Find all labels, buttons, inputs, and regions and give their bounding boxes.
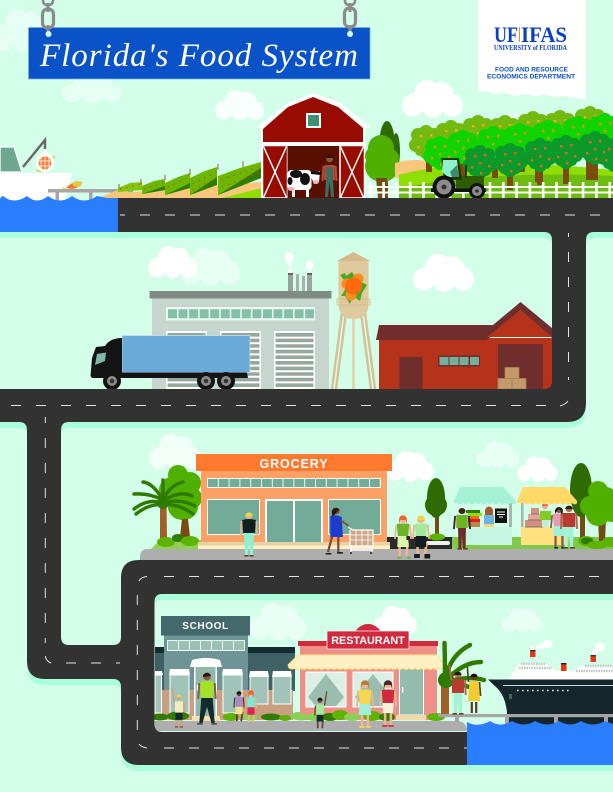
grass [222,188,262,198]
person: girl in red skirt [246,690,256,722]
barn opening [288,146,340,198]
palm [134,480,195,541]
boat cabin [0,147,22,172]
light green tree [365,135,399,198]
school door awning [190,658,222,667]
person: market man green shirt [454,508,470,550]
tower tank [338,261,368,319]
scene: school [152,616,305,721]
grocery window strip [207,478,381,488]
lower pier [438,714,613,728]
sand [98,190,128,198]
scene: red barn [257,93,370,198]
restaurant cornice [298,641,438,646]
chalkboard sign [495,508,507,523]
road [0,198,613,765]
logo wordmark [494,22,567,52]
crates [498,368,526,389]
scene: crop field [118,161,262,198]
grocery store [196,454,392,549]
ship superstructure [508,663,613,682]
scene: red warehouse [376,302,552,389]
barn roof outline [257,93,370,198]
person: man red shirt [561,506,577,549]
water left [0,196,118,232]
ship anchor [509,694,512,699]
restaurant sign: RESTAURANT [331,635,405,647]
person: woman waving on pier [467,667,481,713]
school tower [164,635,248,691]
farmer [322,154,336,197]
fish [62,181,82,190]
person: woman yellow top [357,680,373,728]
yellow stall [517,487,577,545]
warehouse loading door [498,344,543,389]
restaurant bushes [294,710,445,721]
road lane dashes [11,215,613,748]
grocery sign: GROCERY [259,457,329,471]
person: boy near restaurant [315,692,327,728]
restaurant steps [396,715,426,720]
vine rows [118,161,261,195]
right light tree [580,481,613,541]
scene: restaurant [288,624,445,721]
restaurant door [400,668,424,715]
crane arm [23,140,45,167]
school bushes [152,712,305,721]
ship funnels [530,650,596,671]
background clouds [0,9,558,641]
restaurant sign [327,631,409,649]
produce crates [466,510,482,527]
warehouse gable [487,310,552,337]
left chain [42,0,54,37]
department name: ECONOMICS DEPARTMENT [487,74,575,80]
restaurant walls [300,646,437,720]
person: man in lime shirt [197,673,217,725]
cake stand [525,508,543,527]
school wing roof [155,647,295,653]
logo wordmark: UF [494,22,518,47]
cow [288,170,322,197]
panel: UF IFAS logo [478,0,586,99]
factory doors [166,331,315,389]
person: girl in purple top [234,691,244,721]
person: woman pink top [551,507,567,549]
title: Florida's Food System [39,38,358,74]
scene: grocery tree and palm [134,465,205,549]
restaurant awning [288,655,444,670]
department name [487,67,575,80]
mint stall [454,487,516,545]
road shadow [0,204,613,771]
tractor [431,158,486,199]
scene: farmers market [395,463,613,558]
truck wheels [103,372,235,390]
water tower [332,252,375,389]
bushes right [578,536,613,549]
left barn door [262,146,288,198]
yellow roof [517,487,577,504]
water right [467,721,613,765]
department name: FOOD AND RESOURCE [495,67,569,74]
dark tree [425,478,447,540]
factory roof [150,291,332,298]
pier [48,189,133,202]
orange logo [340,272,367,304]
shopping cart [348,527,373,554]
factory building [152,298,329,389]
truck cab [90,338,248,378]
trees beside barn [365,121,400,198]
boat hull [0,173,72,205]
sidewalk upper [140,549,613,560]
grocery sign [196,454,392,471]
school sign: SCHOOL [182,621,229,632]
warehouse small door [400,357,422,389]
vendor [540,503,551,527]
warehouse roof [376,302,552,340]
person: man waving on pier [449,664,466,715]
dark plaza right of grocery [387,537,452,549]
school window strip [167,640,245,651]
school windows [155,675,291,713]
truck trailer [122,336,250,372]
truck [90,336,250,390]
tower legs [332,305,375,389]
right chain [344,0,356,37]
back trees [409,106,607,180]
grocery steps [198,542,390,549]
front trees [463,131,613,190]
restaurant left window [306,672,346,707]
sidewalk lower [155,721,467,731]
bushes [151,534,205,549]
smoke [284,252,314,273]
ship upper decks [519,664,613,671]
school brick base [155,690,293,720]
logo wordmark: UNIVERSITY of FLORIDA [494,44,567,52]
ship smoke [530,640,604,655]
grocery left window [208,500,260,534]
person: woman with black skirt [413,515,430,558]
vendor [484,506,494,527]
warehouse walls [379,338,552,389]
dark tall tree [380,121,400,198]
ship stripe [503,684,613,686]
middle trees [423,113,613,183]
ship hull [488,680,613,728]
person: woman with crossbody bag [395,515,411,558]
sand path [118,182,262,198]
chimneys [288,273,312,291]
person: man with black shirt [241,512,257,557]
barn roof [263,97,363,142]
school door [194,665,217,716]
barn window [306,113,321,128]
warehouse windows [438,356,480,366]
school window awnings [155,669,292,677]
hills [395,160,613,198]
person: woman red top [380,680,396,727]
school steps [192,716,220,721]
logo wordmark: IFAS [521,22,567,47]
restaurant right window [353,672,393,707]
fishing net [36,149,55,172]
panel: title banner [28,28,370,79]
ship portholes [517,690,569,692]
mint roof [454,487,516,504]
restaurant dome [353,624,383,640]
scene: factory [90,252,332,390]
palm near dock [438,643,484,716]
cab window [95,352,106,365]
tower railing [337,299,370,305]
factory window strip [166,307,315,320]
white fence [366,187,613,192]
school sign [161,616,250,636]
person: woman with blue dress [326,508,349,554]
grocery right window [328,500,380,534]
grass behind stalls [452,537,613,549]
tower roof [337,252,370,261]
grocery doors [265,499,323,542]
right dark tree [570,463,596,538]
tree [159,465,202,537]
right barn door [340,146,364,198]
school wing [155,647,295,691]
scene: orchard [366,106,613,199]
grocery walls [201,471,387,542]
person: boy with raised arm [172,687,185,728]
scene: cruise ship [438,640,613,728]
scene: fishing boat [0,140,133,205]
